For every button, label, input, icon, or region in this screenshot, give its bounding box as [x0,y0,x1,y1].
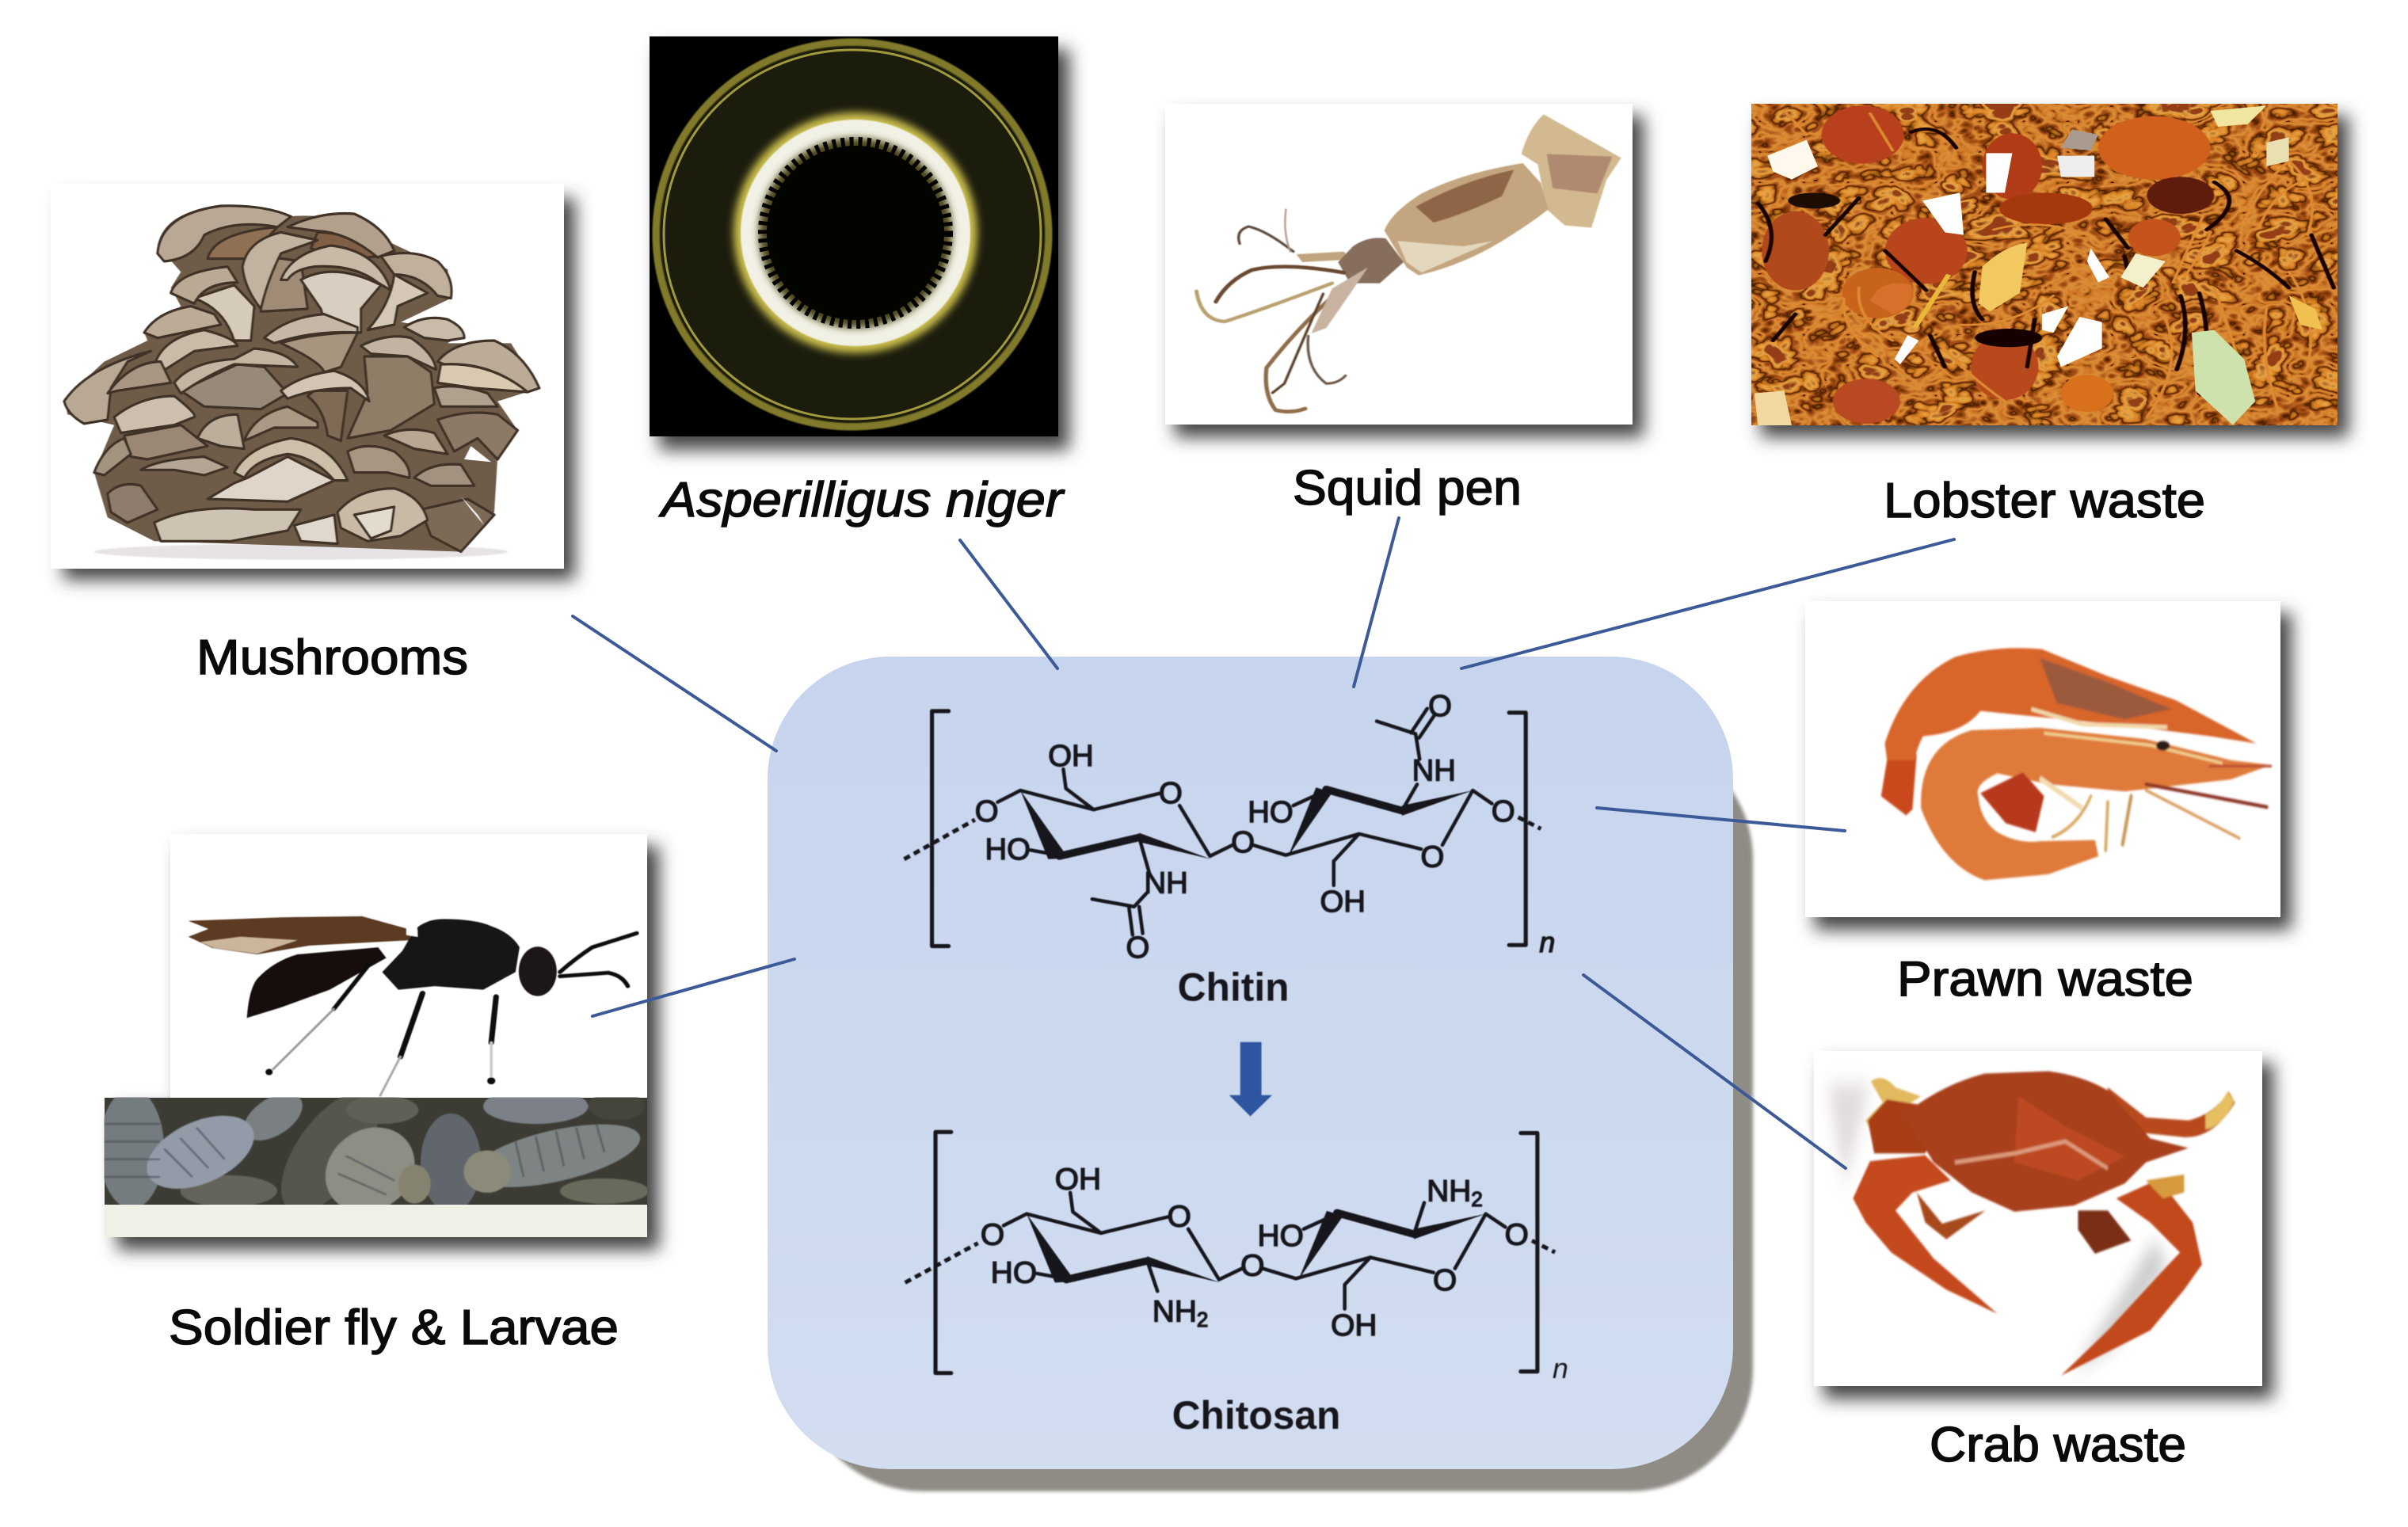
panel: mushrooms photo [51,184,575,580]
panel: squid photo [1165,104,1644,437]
chitin structure: HO [1248,795,1294,829]
chitin structure: NH [1145,866,1188,901]
arrow: chitin to chitosan [1229,1042,1272,1117]
label: Prawn waste: Prawn waste [1897,952,2193,1007]
chitosan structure [905,1132,1568,1384]
chitosan structure: O [981,1218,1004,1252]
chitosan structure: NH [1153,1295,1197,1328]
chitosan structure: O [1433,1263,1457,1297]
chitin structure: HO [985,832,1031,866]
panel: prawn photo [1805,601,2292,930]
chitosan structure: OH [1331,1308,1377,1342]
chitosan structure: NH [1427,1175,1471,1209]
panel: lobster waste photo [1751,104,2349,437]
chitin structure: O [975,794,999,828]
panel: crab photo [1814,1051,2273,1399]
chitosan structure: 2 [1471,1189,1483,1211]
chitin structure: O [1159,776,1183,810]
chitosan structure: OH [1055,1163,1101,1196]
chitin structure: O [1428,689,1452,723]
chitin structure [904,689,1555,965]
label: Squid pen: Squid pen [1293,461,1522,516]
chitin structure: O [1231,825,1255,859]
panel: Aspergillus niger petri dish [650,36,1069,450]
panel: chitin to chitosan [768,657,1753,1491]
connector lines [573,518,1954,1168]
label: Chitosan: Chitosan [1172,1393,1340,1438]
chitin structure: n [1539,927,1555,958]
label: Lobster waste: Lobster waste [1884,474,2205,528]
panel: soldier fly and larvae photos [100,834,659,1250]
chitin structure: OH [1320,885,1366,919]
label: Asperilligus niger: Asperilligus niger [658,473,1065,527]
chitosan structure: HO [1258,1219,1304,1253]
chitosan structure: n [1553,1353,1568,1384]
chitin structure: O [1126,931,1149,965]
chitin structure: NH [1412,753,1456,787]
chitosan structure: O [1168,1200,1191,1234]
chitosan structure: O [1505,1218,1529,1252]
chitin structure: OH [1048,739,1094,773]
chitin structure: O [1492,794,1515,828]
label: Mushrooms: Mushrooms [196,630,468,685]
chitin structure: O [1421,840,1444,874]
chitosan structure: O [1240,1249,1264,1282]
label: Chitin: Chitin [1178,965,1290,1009]
label: Soldier fly & Larvae: Soldier fly & Larvae [169,1300,619,1355]
chitosan structure: HO [991,1256,1037,1289]
chitosan structure: 2 [1197,1309,1208,1331]
label: Crab waste: Crab waste [1930,1418,2186,1472]
icon: larvae [105,1098,647,1205]
icon: soldier fly [189,916,637,1095]
